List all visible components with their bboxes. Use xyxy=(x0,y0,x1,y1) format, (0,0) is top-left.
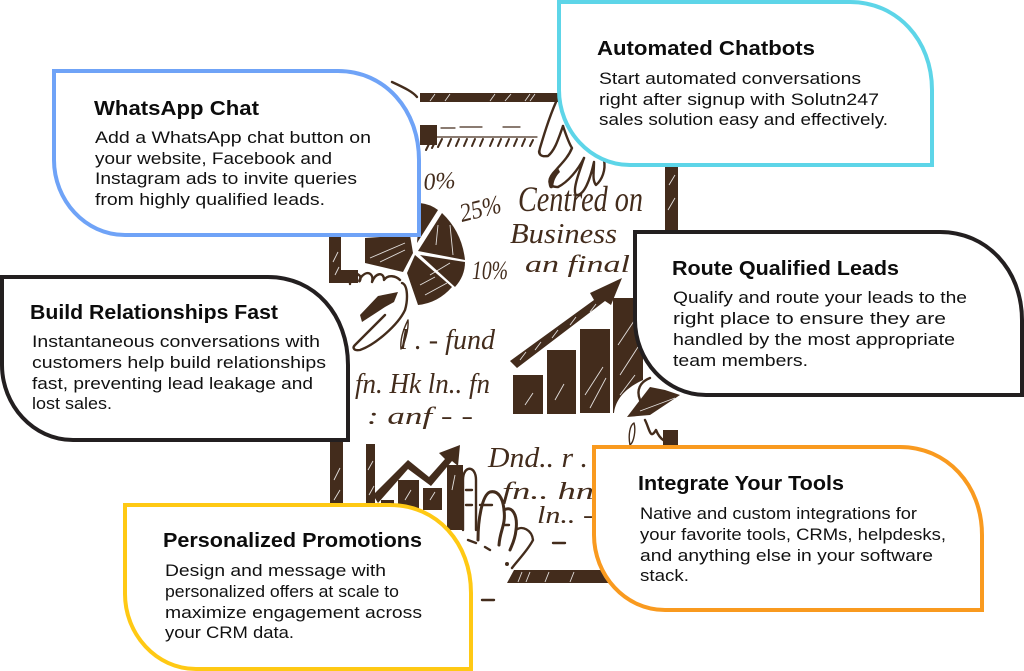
handwritten notes xyxy=(355,168,643,529)
text: Route Qualified Leads description: team members. xyxy=(673,351,808,370)
text: Integrate Your Tools description: your favorite tools, CRMs, helpdesks, xyxy=(640,525,946,544)
handwritten notes: 0% xyxy=(423,168,456,196)
text: Automated Chatbots description: sales solution easy and effectively. xyxy=(599,110,888,129)
handwritten notes: fn.. hn xyxy=(502,479,594,505)
text: Integrate Your Tools description: stack. xyxy=(640,566,689,585)
text: Integrate Your Tools description: and anything else in your software xyxy=(640,546,933,565)
text: Personalized Promotions description: your CRM data. xyxy=(165,623,294,642)
heading: WhatsApp Chat: WhatsApp Chat xyxy=(94,97,259,120)
icon: bottom hand xyxy=(463,469,565,600)
text: Personalized Promotions description: Design and message with xyxy=(165,561,386,580)
heading: Personalized Promotions: Personalized Promotions xyxy=(163,529,422,552)
text: Build Relationships Fast description: customers help build relationships xyxy=(32,353,326,372)
text: WhatsApp Chat description xyxy=(95,128,371,209)
text: Personalized Promotions description: maximize engagement across xyxy=(165,603,422,622)
panel: WhatsApp Chat xyxy=(54,71,419,235)
report frame xyxy=(329,93,678,583)
handwritten notes: fn. Hk ln.. fn xyxy=(355,369,490,400)
handwritten notes: ln.. - xyxy=(537,503,593,529)
text: Automated Chatbots description: right after signup with Solutn247 xyxy=(599,90,879,109)
handwritten notes: Business xyxy=(510,219,617,250)
text: Integrate Your Tools description: Native and custom integrations for xyxy=(640,504,917,523)
text: Automated Chatbots description: Start automated conversations xyxy=(599,69,861,88)
text: Personalized Promotions description: personalized offers at scale to xyxy=(165,582,399,601)
panel: Route Qualified Leads xyxy=(635,232,1022,395)
icon: right hand xyxy=(627,378,680,445)
text: WhatsApp Chat description: Add a WhatsApp chat button on xyxy=(95,128,371,147)
handwritten notes: 10% xyxy=(472,256,508,285)
text: Route Qualified Leads description: right place to ensure they are xyxy=(673,309,946,328)
text: Build Relationships Fast description: lost sales. xyxy=(32,394,112,413)
icon: left hand xyxy=(350,273,408,350)
pie chart xyxy=(365,203,465,305)
small line chart with arrow xyxy=(366,444,463,530)
text: Build Relationships Fast description xyxy=(32,332,326,413)
text: Personalized Promotions description xyxy=(165,561,422,642)
heading: Build Relationships Fast: Build Relationships Fast xyxy=(30,301,278,324)
handwritten notes: : anf - - xyxy=(367,404,473,430)
sketch illustration: hand-drawn business report xyxy=(329,82,680,600)
text: Route Qualified Leads description: handled by the most appropriate xyxy=(673,330,955,349)
text: Route Qualified Leads description xyxy=(673,288,967,370)
text: Route Qualified Leads description: Qualify and route your leads to the xyxy=(673,288,967,307)
heading: Route Qualified Leads: Route Qualified Leads xyxy=(672,257,899,280)
panel: Personalized Promotions xyxy=(125,505,471,669)
text: Automated Chatbots description xyxy=(599,69,888,129)
heading: Integrate Your Tools: Integrate Your Tools xyxy=(638,472,844,495)
handwritten notes: Centred on xyxy=(518,179,643,219)
text: WhatsApp Chat description: your website, Facebook and xyxy=(95,149,332,168)
report header lines xyxy=(392,82,537,150)
panel: Build Relationships Fast xyxy=(2,277,348,440)
panel: Integrate Your Tools xyxy=(594,447,982,610)
handwritten notes: an final xyxy=(525,252,630,278)
text: Build Relationships Fast description: Instantaneous conversations with xyxy=(32,332,320,351)
text: WhatsApp Chat description: Instagram ads to invite queries xyxy=(95,169,357,188)
heading: Automated Chatbots: Automated Chatbots xyxy=(597,37,815,60)
text: WhatsApp Chat description: from highly qualified leads. xyxy=(95,190,325,209)
text: Integrate Your Tools description xyxy=(640,504,946,585)
handwritten notes: l . - fund xyxy=(400,325,496,356)
icon: top hand xyxy=(538,102,605,195)
handwritten notes: Dnd.. r . xyxy=(487,443,588,474)
bar chart with rising arrow xyxy=(510,278,643,414)
text: Build Relationships Fast description: fast, preventing lead leakage and xyxy=(32,374,313,393)
panel: Automated Chatbots xyxy=(559,2,932,165)
handwritten notes: 25% xyxy=(456,190,504,228)
